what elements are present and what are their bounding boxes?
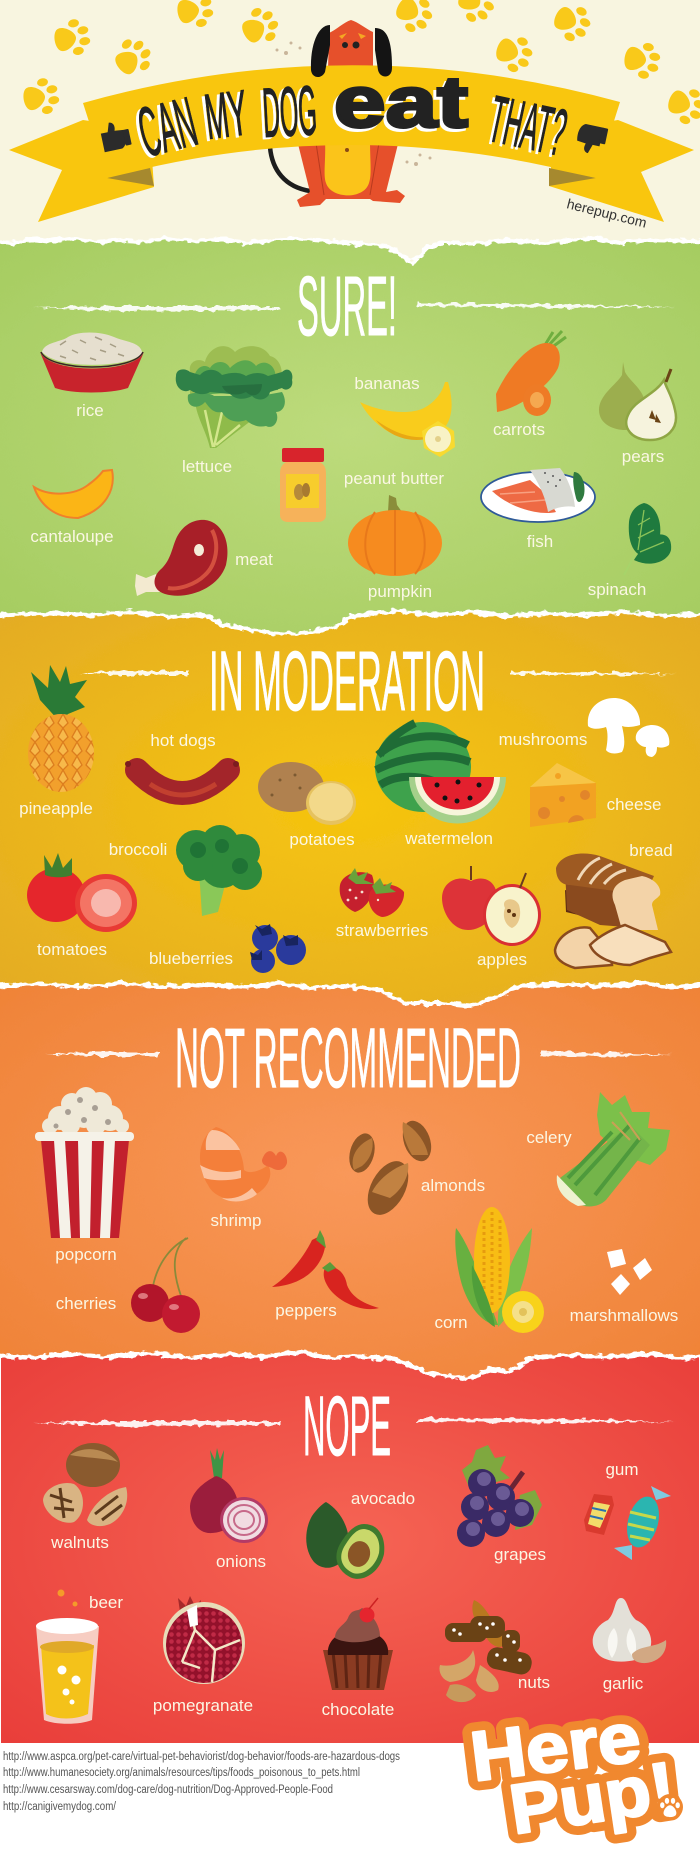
icon: blueberries: [250, 924, 306, 973]
logo lettering: [466, 1698, 680, 1849]
icon: thumbs down: [574, 123, 608, 156]
divider right: sure: [418, 303, 676, 308]
label: pumpkin: pumpkin: [368, 582, 432, 601]
icon: nuts: [439, 1600, 534, 1702]
label: meat: meat: [235, 550, 273, 569]
icon: watermelon: [375, 722, 506, 823]
label: avocado: avocado: [351, 1489, 415, 1508]
title shadow: CAN: [128, 84, 201, 174]
panel: sure: SURE!: [297, 259, 397, 353]
icon: cherries: [131, 1238, 200, 1333]
icon: broccoli: [176, 825, 262, 916]
title text: DOG: [261, 71, 319, 152]
references: http://www.cesarsway.com/dog-care/dog-nutrition/Dog-Approved-People-Food: [3, 1784, 333, 1796]
title text: CAN: [131, 82, 204, 172]
panel: not recommended: [0, 970, 700, 1379]
label: blueberries: blueberries: [149, 949, 233, 968]
references: http://www.aspca.org/pet-care/virtual-pet-behaviorist/dog-behavior/foods-are-hazardous-dogs: [3, 1751, 400, 1763]
divider right: not recommended: [541, 1052, 671, 1057]
references: [3, 1751, 400, 1813]
icon: spinach: [624, 503, 671, 575]
label: lettuce: lettuce: [182, 457, 232, 476]
label: rice: rice: [76, 401, 104, 420]
divider left: sure: [33, 306, 280, 311]
text: THAT?: [480, 83, 570, 171]
label: peppers: peppers: [275, 1301, 337, 1320]
panel: nope: NOPE: [303, 1379, 391, 1473]
icon: pomegranate: [163, 1596, 245, 1684]
icon: potatoes: [258, 762, 356, 825]
label: popcorn: popcorn: [55, 1245, 117, 1264]
label: watermelon: watermelon: [404, 829, 493, 848]
label: walnuts: walnuts: [50, 1533, 109, 1552]
dog tail: [270, 147, 310, 191]
icon: apples: [442, 866, 541, 946]
icon: onions: [190, 1448, 268, 1543]
label: mushrooms: mushrooms: [499, 730, 587, 749]
title shadow: eat: [331, 66, 465, 146]
logo outline: Pup!: [505, 1747, 680, 1849]
icon: rice: [40, 332, 144, 392]
logo outline: [466, 1698, 680, 1849]
label: potatoes: potatoes: [289, 830, 355, 849]
title shadow: [128, 66, 570, 174]
label: onions: onions: [216, 1552, 266, 1571]
divider left: nope: [33, 1421, 280, 1426]
icon: cheese: [530, 763, 596, 827]
icon: cantaloupe: [34, 470, 113, 518]
label: nuts: nuts: [518, 1673, 550, 1692]
title text: MY: [201, 76, 251, 153]
label: celery: celery: [526, 1128, 572, 1147]
panel: in moderation: [0, 600, 700, 1006]
divider right: in moderation: [512, 671, 676, 675]
title: [128, 63, 573, 174]
icon: bread: [555, 853, 671, 968]
icon: strawberries: [340, 868, 404, 917]
icon: grapes: [457, 1445, 542, 1547]
icon: gum: [584, 1486, 671, 1560]
icon: chocolate: [323, 1598, 393, 1690]
label: carrots: carrots: [493, 420, 545, 439]
icon: meat: [135, 520, 228, 596]
icon: mushrooms: [588, 698, 669, 757]
icon: marshmallows: [607, 1249, 652, 1295]
icon: carrots: [496, 331, 566, 416]
label: marshmallows: marshmallows: [570, 1306, 678, 1325]
label: gum: gum: [605, 1460, 639, 1479]
label: grapes: grapes: [494, 1545, 546, 1564]
title text: [131, 63, 573, 172]
title shadow: MY: [198, 78, 248, 155]
label: pomegranate: pomegranate: [153, 1696, 253, 1715]
logo outline: Here: [466, 1698, 645, 1796]
label: peanut butter: peanut butter: [344, 469, 444, 488]
icon: popcorn: [35, 1087, 134, 1238]
icon: pineapple: [28, 665, 94, 792]
banner: [9, 65, 694, 222]
site url: herepup.com: [565, 195, 648, 231]
label: cantaloupe: cantaloupe: [30, 527, 114, 546]
label: fish: fish: [527, 532, 553, 551]
icon: celery: [557, 1092, 670, 1206]
label: cheese: cheese: [607, 795, 661, 814]
dog head: [328, 20, 373, 70]
dog body: [297, 140, 405, 207]
label: beer: beer: [89, 1593, 123, 1612]
references: http://canigivemydog.com/: [3, 1801, 117, 1813]
icon: shrimp: [200, 1127, 287, 1201]
icon: almonds: [345, 1117, 436, 1222]
label: hot dogs: hot dogs: [150, 731, 216, 750]
icon: corn: [455, 1207, 544, 1333]
lettuce stem: [195, 398, 262, 448]
references: http://www.humanesociety.org/animals/resources/tips/foods_poisonous_to_pets.html: [3, 1767, 360, 1779]
icon: tomatoes: [27, 853, 137, 932]
label: tomatoes: tomatoes: [37, 940, 107, 959]
icon: peppers: [272, 1230, 379, 1309]
icon: fish: [481, 468, 595, 522]
divider left: in moderation: [78, 671, 188, 675]
icon: avocado: [306, 1502, 384, 1579]
label: pineapple: pineapple: [19, 799, 93, 818]
label: spinach: spinach: [588, 580, 646, 599]
dog belly: [325, 140, 371, 195]
label: bread: bread: [629, 841, 673, 860]
icon: pumpkin: [348, 495, 442, 576]
header background: [0, 0, 700, 262]
label: apples: apples: [477, 950, 527, 969]
paw prints: [21, 0, 700, 128]
label: chocolate: chocolate: [322, 1700, 394, 1719]
icon: logo paw: [657, 1794, 683, 1820]
banner right tail: [549, 120, 694, 222]
label: bananas: bananas: [354, 374, 420, 393]
divider right: nope: [418, 1418, 676, 1423]
illustration: dog: [270, 20, 432, 207]
label: garlic: garlic: [603, 1674, 644, 1693]
label: strawberries: strawberries: [336, 921, 428, 940]
divider left: not recommended: [45, 1052, 159, 1056]
label: pears: pears: [622, 447, 664, 466]
text: THAT?: [483, 81, 573, 169]
icon: thumbs up: [99, 119, 132, 152]
logo: here pup: [466, 1698, 683, 1849]
banner fold left: [107, 168, 154, 186]
icon: garlic: [593, 1598, 666, 1663]
panel: nope: [1, 1340, 699, 1743]
icon: hot dogs: [125, 761, 239, 795]
icon: lettuce: [176, 346, 292, 448]
icon: peanut butter: [280, 448, 326, 522]
logo lettering: Here: [466, 1698, 645, 1796]
banner left tail: [9, 120, 154, 222]
label: shrimp: shrimp: [210, 1211, 262, 1230]
icon: walnuts: [43, 1443, 127, 1526]
panel: sure: [0, 230, 700, 634]
icon: bananas: [360, 382, 455, 457]
dog ears: [311, 25, 392, 77]
label: corn: corn: [434, 1313, 468, 1332]
logo lettering: Pup!: [505, 1747, 680, 1849]
title shadow: DOG: [258, 73, 316, 154]
label: almonds: almonds: [421, 1176, 485, 1195]
icon: pears: [599, 362, 676, 440]
banner main: [83, 65, 620, 178]
label: cherries: cherries: [56, 1294, 116, 1313]
icon: beer: [36, 1590, 99, 1724]
title text: eat: [334, 63, 468, 143]
banner fold right: [549, 168, 596, 186]
label: broccoli: broccoli: [109, 840, 167, 859]
